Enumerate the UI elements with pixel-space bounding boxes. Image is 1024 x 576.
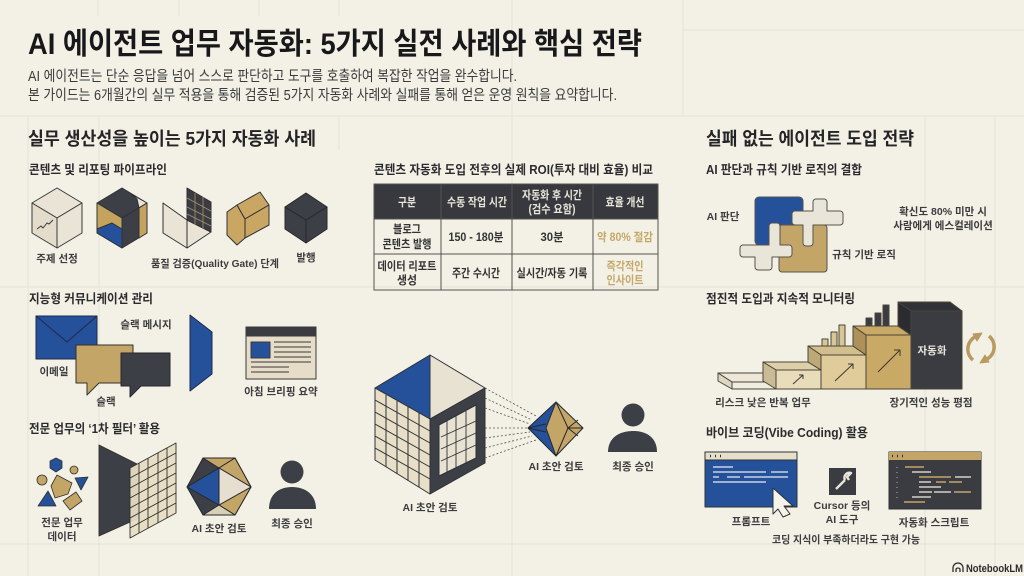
icon: person	[608, 404, 657, 452]
label: 데이터	[48, 530, 76, 543]
label: 주제 선정	[36, 252, 78, 265]
table: 생성	[397, 274, 417, 287]
panel: gradual adoption	[706, 291, 994, 409]
label: 리스크 낮은 반복 업무	[715, 396, 811, 409]
title: AI 에이전트 업무 자동화: 5가지 실전 사례와 핵심 전략	[28, 28, 642, 61]
table: (검수 요함)	[528, 202, 576, 216]
label: 아침 브리핑 요약	[244, 385, 318, 398]
icon: person	[269, 460, 316, 509]
table: 약 80% 절감	[597, 231, 653, 244]
subheading: communication: 지능형 커뮤니케이션 관리	[29, 291, 153, 306]
note: 코딩 지식이 부족하더라도 구현 가능	[772, 533, 920, 546]
table: 즉각적인	[606, 260, 644, 273]
icon: gold box	[227, 192, 269, 245]
panel: vibe coding	[705, 426, 981, 546]
icon: open quality cube	[163, 188, 211, 248]
icon: script window	[889, 452, 981, 509]
icon: dark chat bubble	[121, 353, 170, 397]
callout: 확신도 80% 미만 시	[899, 205, 987, 218]
icon: scattered data shapes	[37, 458, 88, 510]
icon: topic cube	[32, 188, 82, 248]
table: 데이터 리포트	[378, 259, 437, 273]
label: 자동화	[918, 344, 947, 357]
panel: content pipeline	[29, 163, 327, 270]
label: 품질 검증(Quality Gate) 단계	[151, 257, 279, 270]
table: 30분	[540, 231, 564, 244]
panel: first filter	[29, 422, 316, 543]
subheading: vibe coding: 바이브 코딩(Vibe Coding) 활용	[706, 426, 868, 440]
icon: filter with grid	[99, 443, 176, 538]
table: 구분	[398, 196, 416, 209]
subheading: first filter: 전문 업무의 ‘1차 필터’ 활용	[29, 422, 160, 436]
heading: automation cases: 실무 생산성을 높이는 5가지 자동화 사례	[28, 129, 316, 149]
table: 콘텐츠 발행	[382, 237, 432, 251]
label: 규칙 기반 로직	[832, 248, 896, 261]
icon: cycle arrows	[968, 333, 994, 363]
icon: blue gate	[190, 315, 212, 391]
subheading: hybrid logic: AI 판단과 규칙 기반 로직의 결합	[706, 162, 862, 177]
table: 150 - 180분	[448, 231, 504, 244]
label: 발행	[296, 251, 316, 264]
table: 인사이트	[606, 274, 644, 287]
label: AI 판단	[707, 211, 740, 223]
label: Cursor 등의	[814, 500, 870, 512]
label: 자동화 스크립트	[899, 516, 970, 529]
icon: dark cube	[285, 193, 327, 243]
label: 슬랙	[96, 396, 116, 408]
label: 최종 승인	[612, 460, 654, 473]
icon: gold chat bubble	[76, 345, 133, 395]
table: 주간 수시간	[452, 267, 500, 280]
panel: communication management	[29, 291, 318, 408]
icon: data cube	[375, 355, 485, 494]
subheading: content pipeline: 콘텐츠 및 리포팅 파이프라인	[29, 163, 167, 177]
table: 효율 개선	[606, 196, 644, 209]
table: 실시간/자동 기록	[516, 266, 588, 280]
icon: puzzle	[740, 197, 843, 272]
label: 프롬프트	[732, 516, 771, 528]
icon: email envelope	[36, 316, 97, 359]
icon: wrench tool	[829, 468, 856, 495]
table: 수동 작업 시간	[447, 196, 507, 209]
connector: dashed projection lines	[485, 388, 536, 458]
icon: split cube	[97, 188, 147, 248]
label: AI 초안 검토	[529, 461, 584, 473]
heading: adoption strategy: 실패 없는 에이전트 도입 전략	[706, 129, 914, 149]
chart: staircase	[718, 302, 962, 389]
label: 이메일	[40, 365, 68, 378]
table: 자동화 후 시간	[522, 188, 582, 202]
label: 최종 승인	[271, 517, 313, 530]
intro text: AI 에이전트는 단순 응답을 넘어 스스로 판단하고 도구를 호출하여 복잡한 작업을 완수합니다.	[28, 68, 517, 85]
intro text	[28, 68, 617, 104]
label	[814, 500, 870, 526]
callout: 사람에게 에스컬레이션	[893, 219, 993, 232]
icon: AI diamond	[528, 402, 583, 456]
table	[374, 184, 658, 290]
callout	[893, 205, 993, 232]
table: 블로그	[393, 223, 421, 236]
label: 슬랙 메시지	[120, 318, 172, 331]
label: AI 초안 검토	[403, 502, 458, 514]
subheading: gradual adoption: 점진적 도입과 지속적 모니터링	[706, 291, 855, 306]
icon: AI review hexagon	[187, 458, 251, 515]
panel: hybrid logic	[706, 162, 993, 272]
icon: briefing window	[246, 327, 316, 379]
panel: ROI comparison	[374, 162, 658, 514]
label	[41, 516, 83, 543]
intro text: 본 가이드는 6개월간의 실무 적용을 통해 검증된 5가지 자동화 사례와 실패를 통해 얻은 운영 원칙을 요약합니다.	[28, 87, 617, 104]
label: 장기적인 성능 평점	[889, 396, 973, 409]
label: AI 초안 검토	[192, 523, 247, 535]
label: AI 도구	[826, 514, 859, 526]
label: 전문 업무	[41, 516, 83, 529]
icon: prompt window	[705, 452, 797, 517]
table title: 콘텐츠 자동화 도입 전후의 실제 ROI(투자 대비 효율) 비교	[374, 162, 653, 177]
